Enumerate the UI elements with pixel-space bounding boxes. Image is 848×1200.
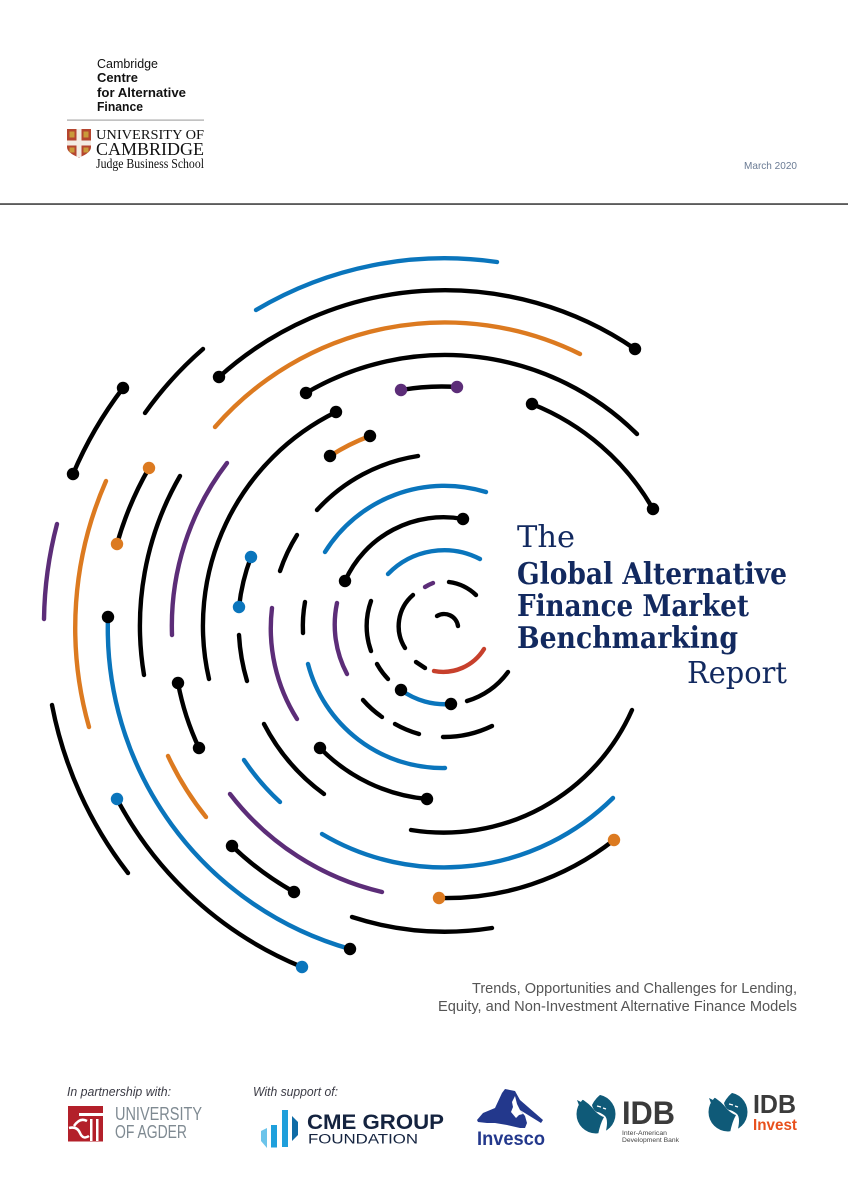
arc: black r365 upper left [145,349,203,413]
arc: black r171 left [280,535,297,571]
title: The [517,520,575,555]
title: Benchmarking [517,621,738,656]
arc: black with orange dots [433,834,620,904]
arc: black centre top right [449,582,476,595]
arc: purple r170 left [271,608,297,719]
arc: black dash r105 b [395,724,419,734]
arc: outer blue top [256,258,497,310]
logo: University of Agder: UNIVERSITY [115,1104,202,1124]
arc: black r74 left [367,601,371,651]
arc: blue r236 lower left [244,760,280,802]
subtitle [438,981,797,1015]
arc: black r268 with dots [172,677,205,754]
logo: Inter-American Development Bank: Inter-American [622,1130,667,1137]
arc: black r137 left [303,602,305,633]
logo: CME Group Foundation [261,1110,444,1148]
arc: black r366 with blue dots [111,793,308,973]
label: in partnership with: In partnership with: [67,1085,171,1099]
arc: black r108 with dots [339,513,469,587]
arc: black r170 with dots [314,742,433,805]
logo: Inter-American Development Bank: Development Bank [622,1137,680,1144]
arc: orange top [215,322,580,427]
subtitle: Trends, Opportunities and Challenges for Lending, [472,981,797,997]
logo: IDB Invest: IDB [753,1089,796,1119]
header logo: Cambridge Centre for Alternative Finance: Centre [97,71,138,85]
header logo: Cambridge Centre for Alternative Finance [97,57,186,114]
arc: short orange with black dots [324,430,376,462]
logo text: University of Cambridge Judge Business School: UNIVERSITY OF [96,128,204,143]
arc: purple r269 lower [230,794,382,892]
logo: University of Agder [68,1104,202,1142]
title: Finance Market [517,589,749,624]
radial arc graphic [44,258,659,973]
arc: black r201 lower left [264,724,324,794]
arc: orange r365 left [75,481,106,727]
header logo: Cambridge Centre for Alternative Finance: Cambridge [97,57,158,71]
arc: purple r396 left [44,524,57,619]
arc: short purple centre [425,583,433,587]
arc: innermost black [437,614,458,626]
logo text: University of Cambridge Judge Business School: Judge Business School [96,156,204,171]
arc: red centre [434,649,484,672]
subtitle: Equity, and Non-Investment Alternative Finance Models [438,999,797,1015]
arc: long blue r333 [102,611,356,955]
arc: short black centre [416,662,425,668]
label: with support of: With support of: [253,1085,338,1099]
arc: black r206 lower right [411,710,632,833]
logo: CME Group Foundation: CME GROUP [307,1111,444,1134]
arc: black r172 [317,456,418,510]
arc: orange r300 lower left [168,756,206,817]
arc: purple r268 left [172,463,227,635]
arc: black top with dots [213,290,641,383]
arc: black r398 with dots [67,382,129,480]
arc: black with orange dots left [111,462,155,550]
logo: CME Group Foundation: FOUNDATION [308,1132,418,1146]
arc: blue r141 [325,486,486,552]
arc: black r302 with dots [226,840,300,898]
arc: black r73 lower left [377,664,388,679]
header logo: Cambridge Centre for Alternative Finance: Finance [97,100,143,114]
arc: blue r78 [388,550,480,574]
logo: University of Agder: OF AGDER [115,1122,187,1142]
logo text: University of Cambridge Judge Business School: CAMBRIDGE [96,139,204,159]
arc: long black left [203,406,342,679]
arc: black r303 lower [352,917,492,932]
arc: black with blue dots left [233,551,257,613]
arc: black dash r105 a [363,700,382,717]
arc: black r300 left [140,476,180,675]
arc: black r200 left [239,635,247,681]
logo: Inter-American Development Bank: IDB [622,1095,675,1131]
arc: black centre left [399,595,413,648]
arc: blue r139 lower left [308,664,445,768]
arc: blue with black dots lower centre [395,684,457,710]
icon: University of Cambridge shield [67,129,91,158]
arc: black right with dots [526,398,659,515]
arc: blue r240 lower [322,798,613,867]
arc: black dash r110 [443,726,492,737]
logo: Invesco: Invesco [477,1129,545,1150]
arc: black top second [300,355,637,434]
title: Report [687,656,787,691]
arc: black r396 lower left [52,705,128,873]
header logo: Cambridge Centre for Alternative Finance: for Alternative [97,86,186,100]
title: Global Alternative [517,557,787,592]
logo text: University of Cambridge Judge Business School [96,128,204,171]
arc: black lower right inner [467,672,508,701]
date: March 2020 [744,160,797,172]
logo: Inter-American Development Bank [576,1090,680,1144]
title [517,520,787,691]
logo: IDB Invest [708,1088,798,1134]
arc: purple r105 [335,603,347,674]
logo: Invesco [477,1089,545,1150]
logo: IDB Invest: Invest [753,1117,798,1134]
arc: short black with purple dots [395,381,463,396]
